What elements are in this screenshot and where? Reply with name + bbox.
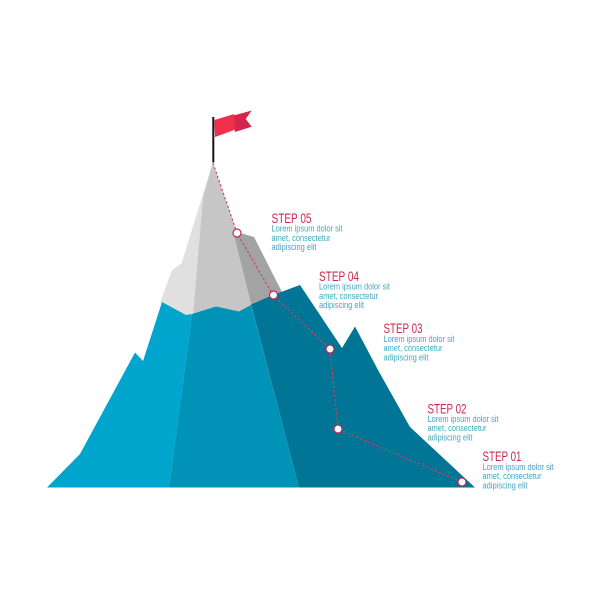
step 01 text — [482, 449, 554, 490]
step 05 text: adipiscing elit — [272, 241, 317, 252]
snow cap: light face — [160, 162, 213, 316]
step 05 text: STEP 05 — [272, 211, 312, 226]
snow cap: middle face — [193, 162, 252, 316]
flag banner front — [214, 114, 236, 137]
step 04 text: Lorem ipsum dolor sit — [319, 280, 390, 292]
dashed route line — [213, 163, 462, 482]
mountain: right dark blue face — [251, 285, 475, 488]
step 03 text: adipiscing elit — [384, 352, 429, 362]
step 01 text: Lorem ipsum dolor sit — [482, 461, 554, 472]
climbing route — [213, 163, 466, 486]
flag banner back — [232, 110, 252, 132]
step 05 text — [272, 211, 343, 252]
waypoint 04 — [270, 291, 278, 299]
step 03 text: STEP 03 — [384, 321, 422, 336]
mountain: middle blue face — [169, 305, 299, 488]
waypoint 05 — [233, 229, 241, 237]
flag — [212, 110, 252, 162]
step 03 text: amet, consectetur — [384, 342, 442, 353]
waypoint 01 — [458, 478, 466, 486]
step 02 text — [428, 401, 499, 442]
mountain: left blue face — [47, 302, 192, 488]
waypoint 03 — [326, 345, 334, 353]
step 02 text: Lorem ipsum dolor sit — [428, 413, 499, 424]
waypoint 02 — [334, 425, 342, 433]
step 01 text: amet, consectetur — [482, 470, 542, 481]
snow cap: shaded face — [233, 231, 283, 305]
step 03 text — [384, 321, 455, 362]
step 01 text: STEP 01 — [482, 449, 522, 464]
step 03 text: Lorem ipsum dolor sit — [384, 333, 455, 344]
step 01 text: adipiscing elit — [482, 480, 528, 490]
step 04 text: STEP 04 — [319, 269, 359, 284]
step 04 text — [319, 269, 390, 310]
step 05 text: amet, consectetur — [272, 232, 330, 243]
mountain — [47, 162, 475, 488]
step 04 text: amet, consectetur — [319, 290, 378, 301]
step 05 text: Lorem ipsum dolor sit — [272, 222, 343, 234]
step 02 text: adipiscing elit — [428, 432, 473, 442]
step 02 text: amet, consectetur — [428, 422, 486, 433]
step 02 text: STEP 02 — [428, 401, 466, 416]
flag pole — [212, 117, 214, 162]
step 04 text: adipiscing elit — [319, 299, 364, 310]
